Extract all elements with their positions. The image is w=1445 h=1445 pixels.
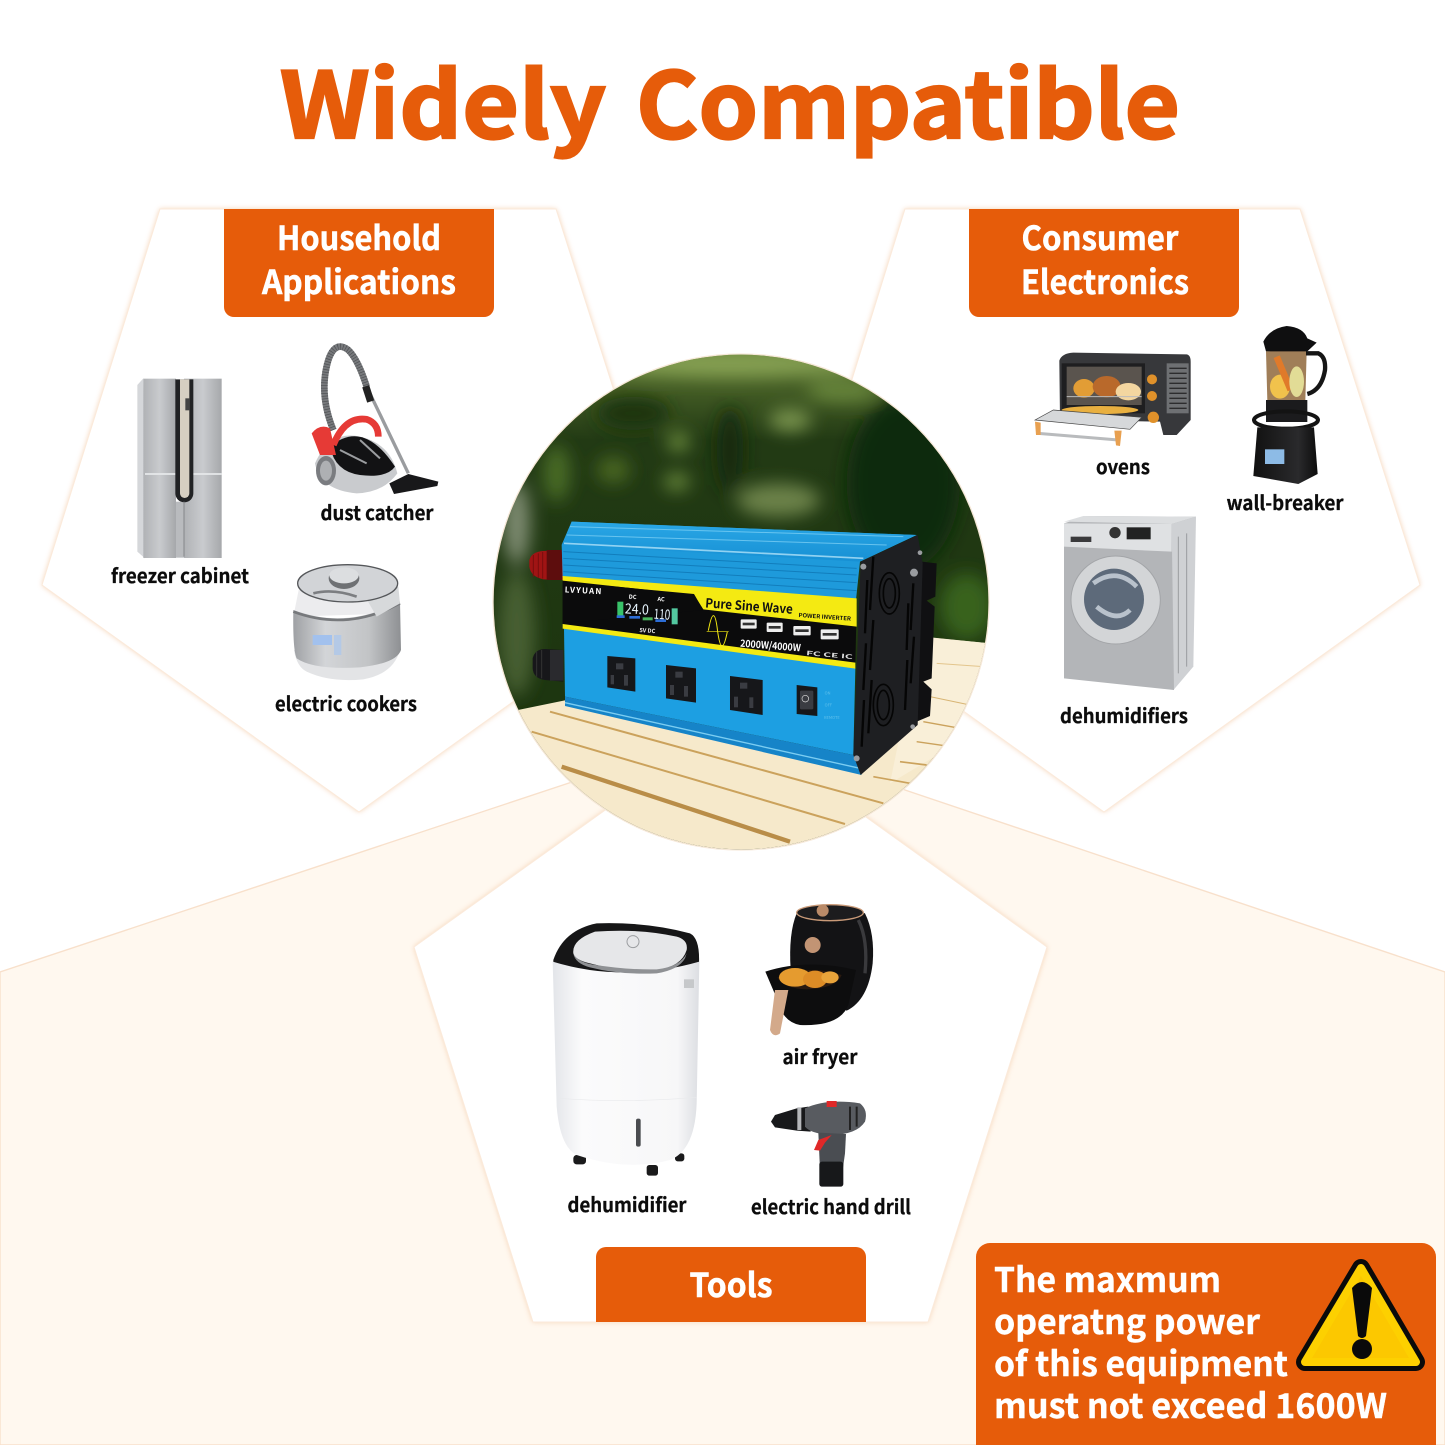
product photo: inverter in circle [490,350,993,851]
title: Widely [280,33,606,165]
icon: warning triangle [1305,1268,1416,1362]
icon: wall-breaker blender [1253,326,1325,484]
product photo: inverter in circle: 24.0 [624,598,650,620]
title [280,33,1180,165]
title: Compatible [636,33,1180,165]
heading tag: consumer electronics: Electronics [1021,256,1189,304]
panel: consumer electronics pentagon [788,209,1420,812]
cream lower background [0,700,1445,1445]
label: freezer cabinet: freezer cabinet [111,560,250,589]
callout: maximum power warning: operatng power [994,1295,1260,1344]
mounting bracket [917,562,937,722]
icon: dust catcher [312,347,438,494]
callout: maximum power warning: must not exceed 1600W [994,1379,1387,1428]
icon: dehumidifier [553,923,699,1176]
icon: washing machine [1064,516,1196,690]
heading tag: tools [596,1247,866,1322]
inverter top and upper front [562,522,917,600]
callout: maximum power warning: of this equipment [994,1337,1288,1386]
product photo: inverter in circle: OFF [825,703,833,709]
label: dust catcher: dust catcher [320,497,434,526]
red terminal [529,550,563,580]
product photo: inverter in circle: ON [825,690,831,696]
icon: electric hand drill [771,1101,866,1187]
USB ports [741,619,839,639]
icon: oven [1035,353,1191,446]
heading tag: household applications: Applications [261,256,456,304]
band text: LVYUAN [565,584,602,597]
product photo: inverter in circle: FC CE IC [806,648,853,661]
label: air fryer: air fryer [782,1041,858,1070]
black label band [563,580,857,665]
label: ovens: ovens [1096,451,1150,480]
label: dehumidifier: dehumidifier [568,1189,687,1218]
heading tag: household applications [224,209,494,317]
product photo: inverter in circle: 110 [653,604,671,625]
product photo: inverter in circle: REMOTE [824,715,840,721]
heading tag: household applications: Household [277,212,441,260]
icon: electric cooker [293,565,401,680]
blurred foliage [498,350,993,697]
label: electric cookers: electric cookers [275,688,417,717]
product photo: inverter in circle: 5V DC [639,625,656,635]
side panel [853,535,923,775]
AC sockets [607,656,817,716]
callout: maximum power warning: The maxmum [994,1253,1221,1302]
heading tag: consumer electronics [969,209,1239,317]
product photo: inverter in circle: 2000W/4000W [740,635,801,654]
label: electric hand drill: electric hand drill [751,1191,911,1220]
product photo: inverter in circle: Pure Sine Wave [705,592,794,618]
black terminal [533,649,563,682]
table [490,637,990,850]
heading tag: tools: Tools [690,1259,772,1307]
product photo: inverter in circle: DC [629,592,637,601]
front face [564,628,855,755]
panel: tools pentagon [414,720,1047,1322]
product photo: inverter in circle: POWER INVERTER [798,610,851,623]
label: wall-breaker: wall-breaker [1226,487,1344,516]
panel: household pentagon [42,209,676,812]
label: dehumidifiers: dehumidifiers [1060,700,1188,729]
sine wave glyph [708,616,727,646]
icon: air fryer [765,905,873,1035]
callout: maximum power warning [976,1243,1436,1445]
product photo: inverter in circle: AC [656,594,665,603]
yellow banner and stripes [563,576,857,627]
icon: freezer cabinet [137,378,222,558]
heading tag: consumer electronics: Consumer [1022,212,1179,260]
